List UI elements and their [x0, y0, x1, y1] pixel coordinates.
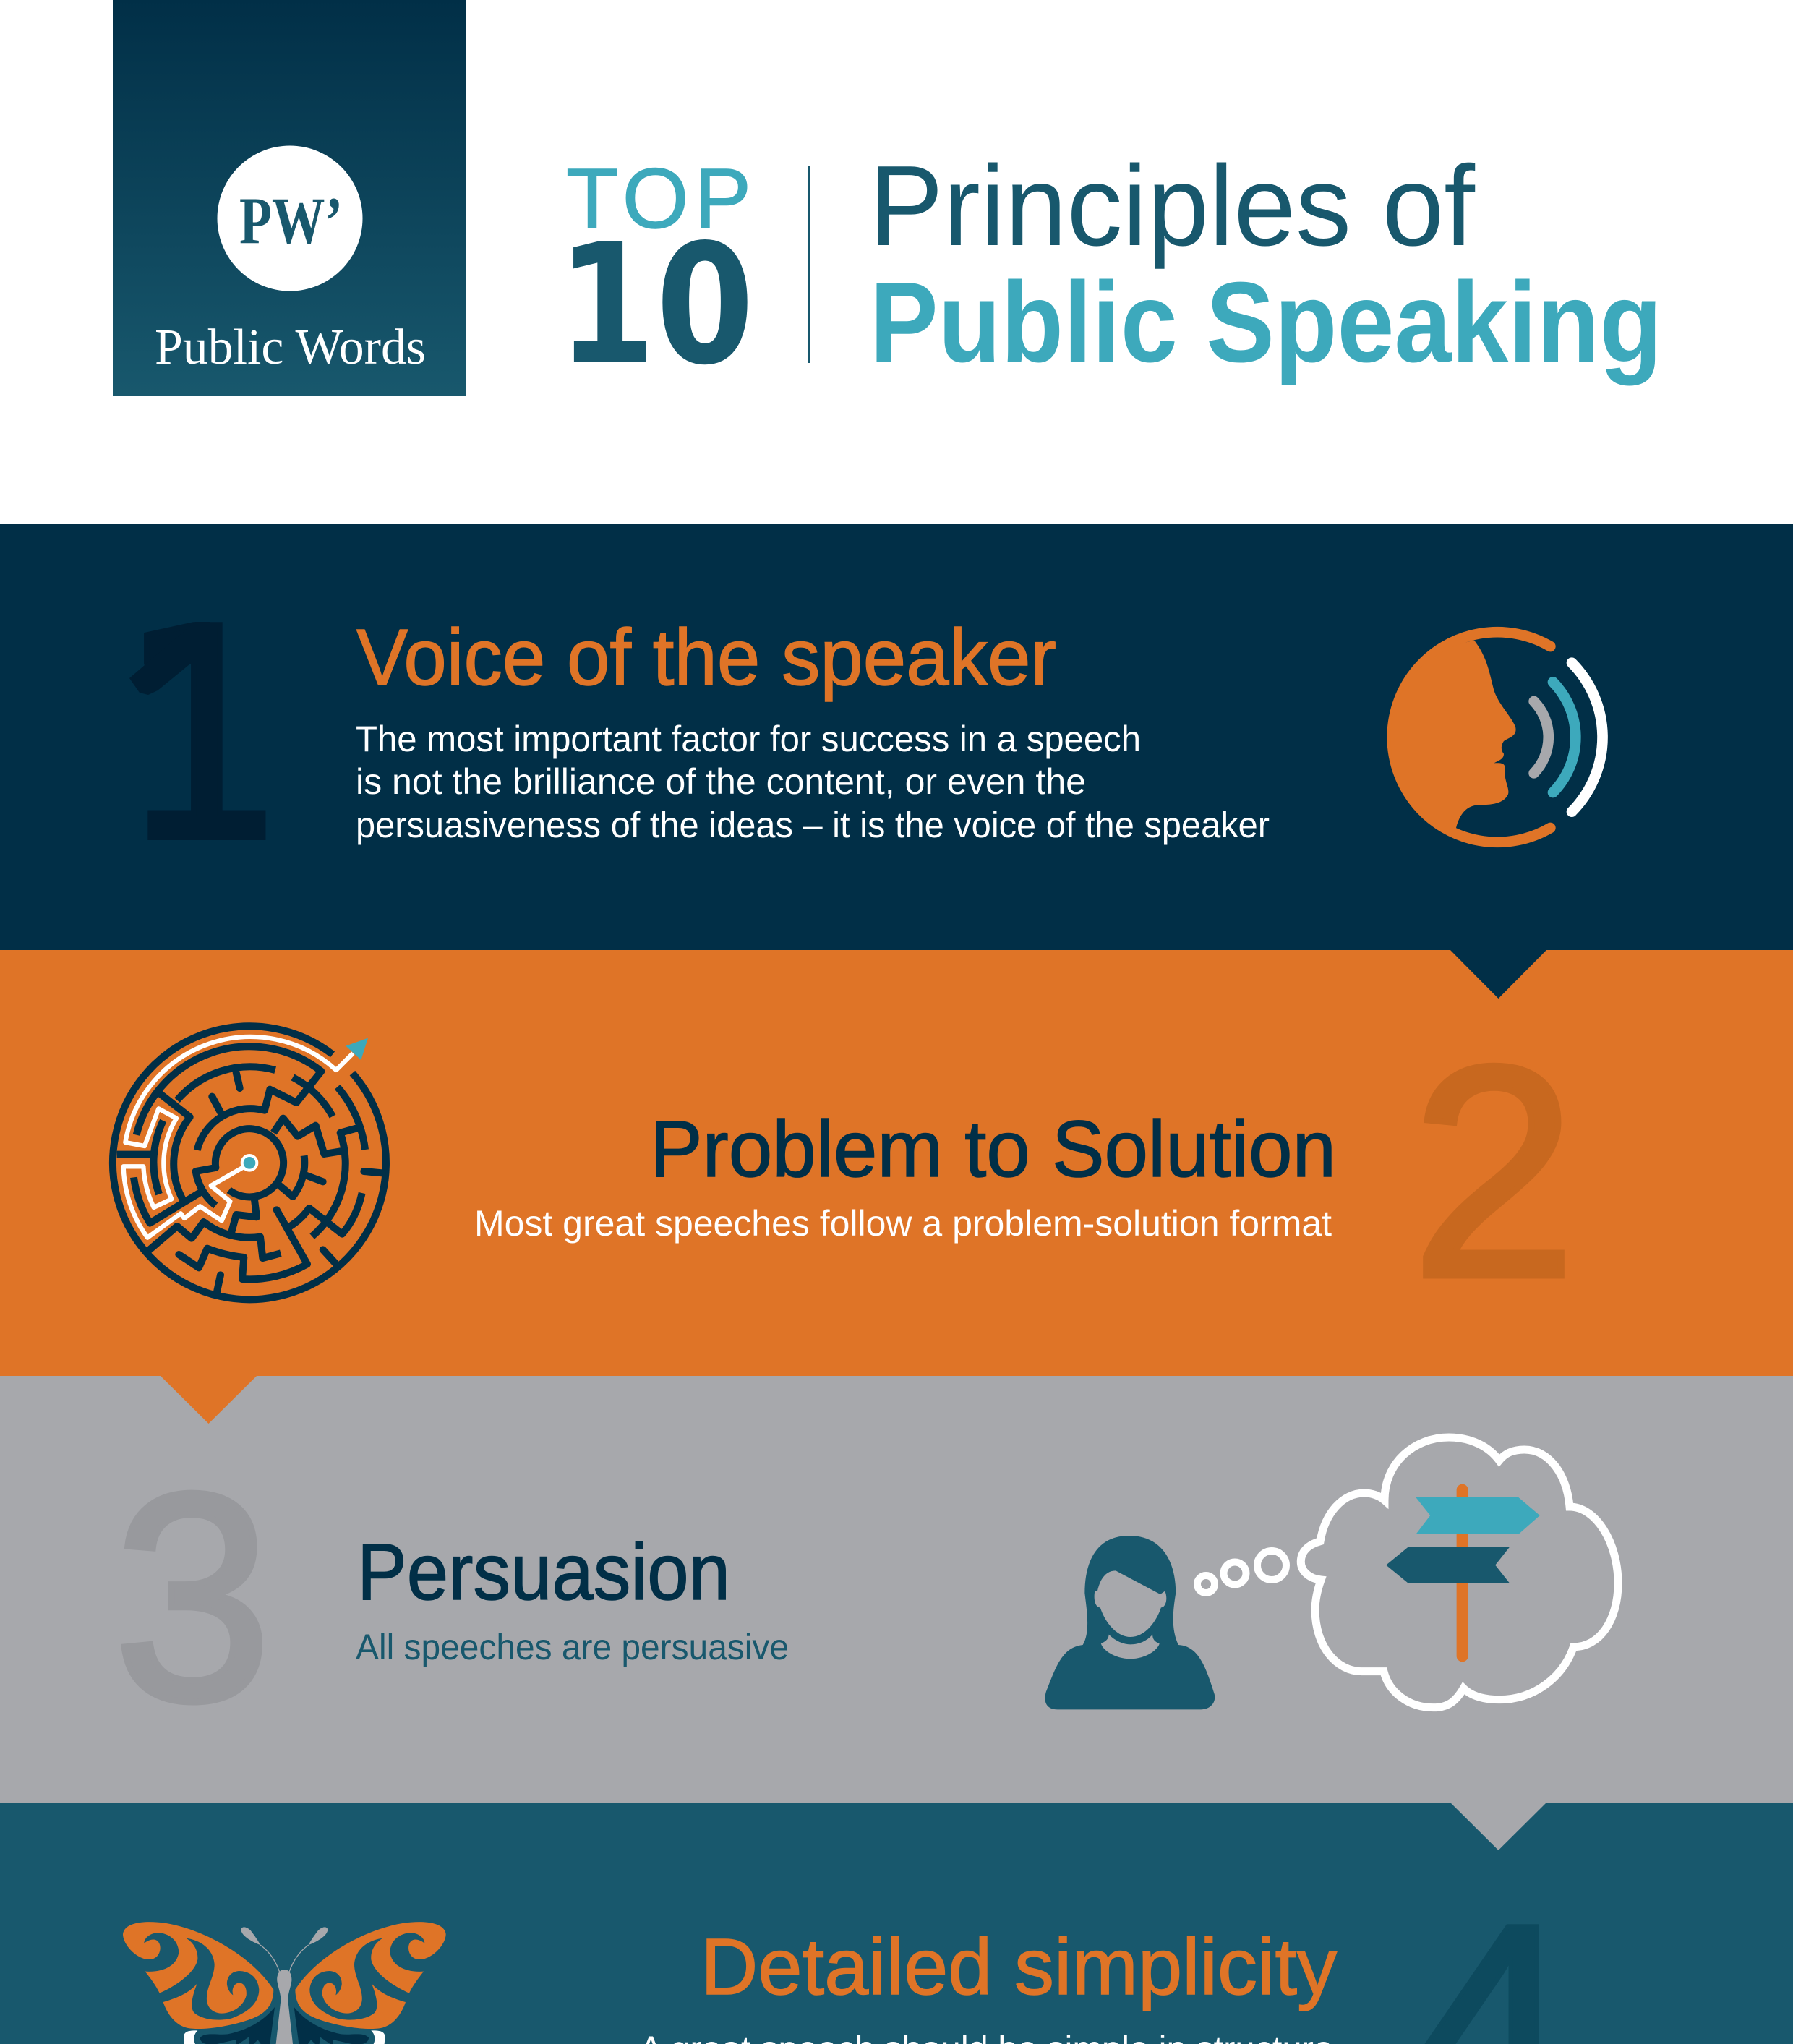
body text [356, 719, 1270, 845]
logo panel: PW’ [239, 184, 343, 257]
logo panel: Public Words [155, 320, 426, 375]
icon: speaking head [1390, 632, 1603, 842]
body text: The most important factor for success in a speech [356, 719, 1141, 759]
icon: person thinking about signpost [1045, 1437, 1618, 1709]
panel: 3 persuasion [0, 1376, 1793, 1803]
body text: is not the brilliance of the content, or even the [356, 761, 1086, 802]
panel: 2 problem to solution [0, 950, 1793, 1376]
number 10: 10 [557, 209, 754, 402]
panel: 4 detailed simplicity [0, 1803, 1793, 2044]
icon: maze [113, 1026, 386, 1299]
arrow: from panel 1 [1450, 950, 1546, 999]
title line: public speaking: Public Speaking [870, 259, 1662, 386]
icon: butterfly [123, 1922, 446, 2044]
top label: TOP [566, 151, 751, 247]
heading: Problem to Solution [650, 1105, 1336, 1194]
heading: Persuasion [357, 1528, 730, 1617]
body text: Most great speeches follow a problem-solution format [474, 1203, 1332, 1244]
number 3: 3 [114, 1433, 272, 1762]
number 1: 1 [117, 568, 288, 907]
arrow: from panel 3 [1450, 1803, 1546, 1850]
arrow: from panel 2 [161, 1376, 257, 1424]
header [0, 0, 1793, 524]
title line: principles of: Principles of [869, 142, 1476, 270]
panel: 1 voice of the speaker [0, 524, 1793, 950]
heading: Voice of the speaker [356, 613, 1056, 702]
number 2: 2 [1411, 1004, 1576, 1339]
body text: All speeches are persuasive [356, 1627, 789, 1667]
heading: Detailed simplicity [701, 1923, 1337, 2011]
logo panel [113, 0, 466, 396]
body text: persuasiveness of the ideas – it is the voice of the speaker [356, 805, 1270, 845]
